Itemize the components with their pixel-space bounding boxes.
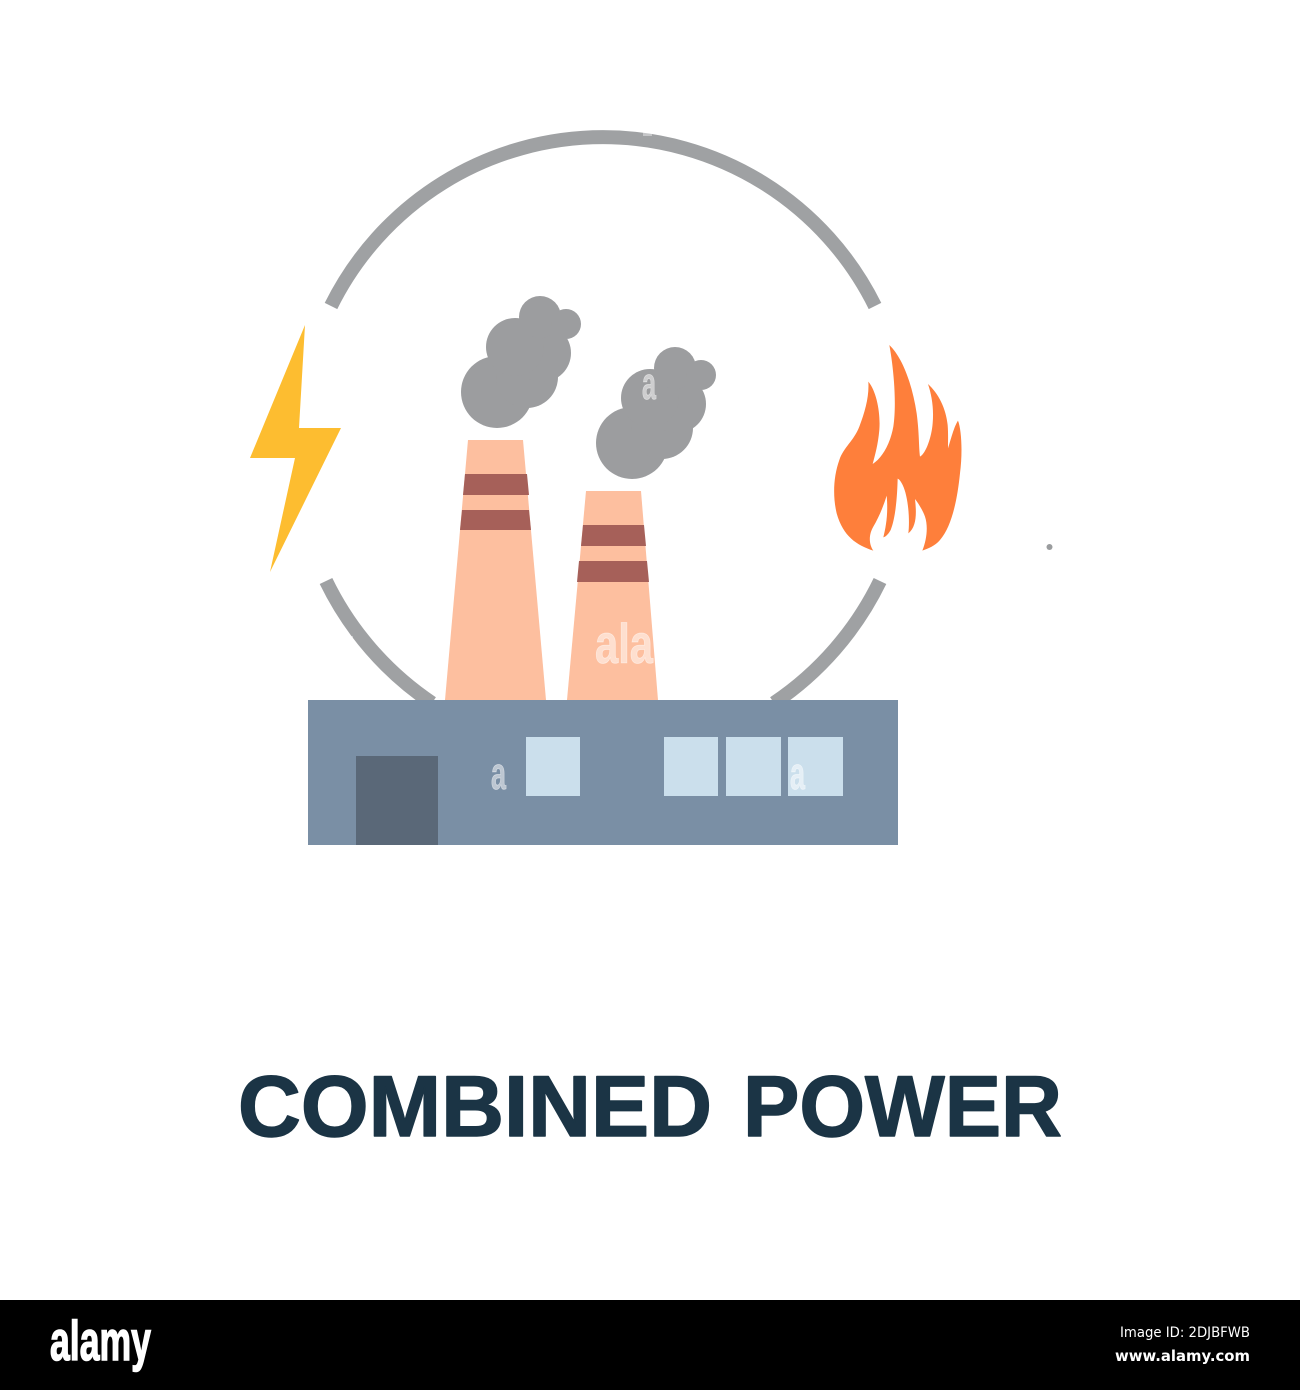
icon: circular ring arcs: [326, 137, 880, 703]
watermark fragments: [346, 131, 806, 799]
icon: flame: [834, 345, 961, 551]
icon: lightning bolt: [250, 325, 341, 572]
icon: smoke cloud left: [461, 296, 581, 428]
windows: [526, 737, 843, 796]
watermark fragments: a: [642, 358, 657, 409]
title: POWER: [743, 1059, 1062, 1155]
title: COMBINED: [238, 1059, 712, 1155]
icon: left chimney: [445, 440, 546, 700]
icon: right chimney: [567, 491, 658, 700]
door: [356, 756, 438, 845]
watermark fragments: a: [491, 748, 507, 799]
footer bar: [0, 1300, 1300, 1390]
logo: alamy: alamy: [50, 1309, 151, 1372]
icon: factory building: [308, 700, 898, 845]
watermark fragments: a: [790, 748, 806, 799]
stray dot: [1046, 544, 1052, 550]
icon: smoke cloud right: [596, 347, 716, 479]
title: [238, 1059, 1062, 1155]
image id: Image ID: 2DJBFWB: [1120, 1325, 1250, 1341]
website: www.alamy.com: [1115, 1347, 1250, 1365]
watermark fragments: ala: [595, 612, 654, 675]
